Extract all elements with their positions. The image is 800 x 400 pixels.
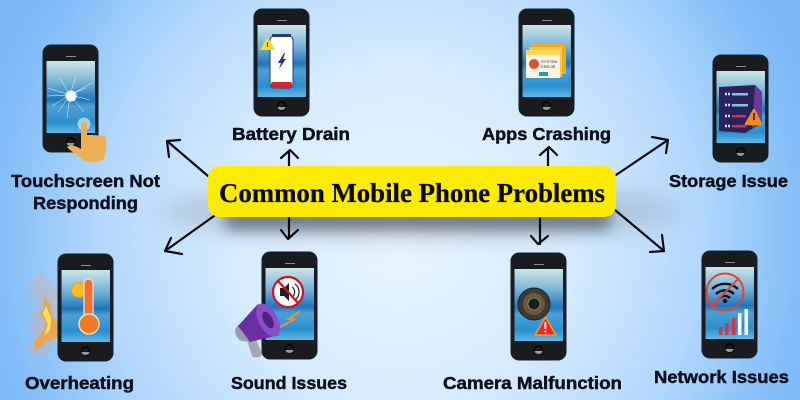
arrow: to storage: [616, 137, 668, 175]
title banner: [208, 166, 616, 217]
arrow: to battery: [281, 150, 298, 166]
arrows from title to problems: [165, 137, 668, 254]
icon: muted speaker: [273, 277, 303, 327]
label: touchscreen not responding: Responding: [33, 193, 138, 213]
icon: low battery: [260, 34, 293, 88]
phone: battery: [254, 9, 309, 116]
icon: server warning: [719, 85, 762, 133]
label: camera malfunction: Camera Malfunction: [443, 373, 622, 393]
phone: apps: [519, 9, 574, 116]
panel: network issues: [654, 251, 789, 387]
icon: lens with warning: [518, 288, 556, 335]
panel: storage issue: [669, 55, 788, 191]
label: storage issue: Storage Issue: [669, 171, 788, 191]
icon: flames: [27, 272, 58, 358]
label: overheating: Overheating: [25, 373, 134, 393]
icon: no wifi and signal bars: [706, 274, 748, 335]
arrow: to network: [615, 210, 664, 252]
phone: storage: [713, 55, 768, 162]
label: apps crashing: Apps Crashing: [482, 124, 611, 144]
icon: thermometer and sun: [72, 279, 99, 334]
icon: system error windows: SYSTEM: [541, 59, 557, 64]
arrow: to overheating: [165, 216, 214, 254]
icon: system error windows: ERROR: [541, 64, 556, 69]
panel: apps crashing: [482, 9, 611, 144]
arrow: to sound: [281, 217, 298, 239]
icon: system error windows: [526, 44, 566, 78]
phone: touchscreen: [43, 45, 98, 152]
arrow: to camera: [531, 217, 548, 244]
label: network issues: Network Issues: [654, 367, 789, 387]
panel: sound issues: [231, 252, 347, 393]
icon: megaphone: [235, 300, 285, 357]
phone: network: [702, 251, 757, 358]
panel: overheating: [25, 254, 134, 393]
panel: battery drain: [232, 9, 350, 144]
label: battery drain: Battery Drain: [232, 124, 350, 144]
label: touchscreen not responding: [11, 171, 160, 213]
icon: cracked glass and finger: [47, 76, 106, 162]
panel: camera malfunction: [443, 253, 622, 393]
panel: touchscreen not responding: [11, 45, 160, 213]
title shadow: [160, 188, 680, 236]
label: touchscreen not responding: Touchscreen Not: [11, 171, 160, 191]
title banner: Common Mobile Phone Problems: [219, 177, 605, 208]
phone: overheating: [58, 254, 113, 361]
label: sound issues: Sound Issues: [231, 373, 347, 393]
phone: camera: [511, 253, 566, 360]
phone: sound: [262, 252, 317, 359]
arrow: to touchscreen: [167, 140, 208, 176]
arrow: to apps: [540, 147, 557, 166]
